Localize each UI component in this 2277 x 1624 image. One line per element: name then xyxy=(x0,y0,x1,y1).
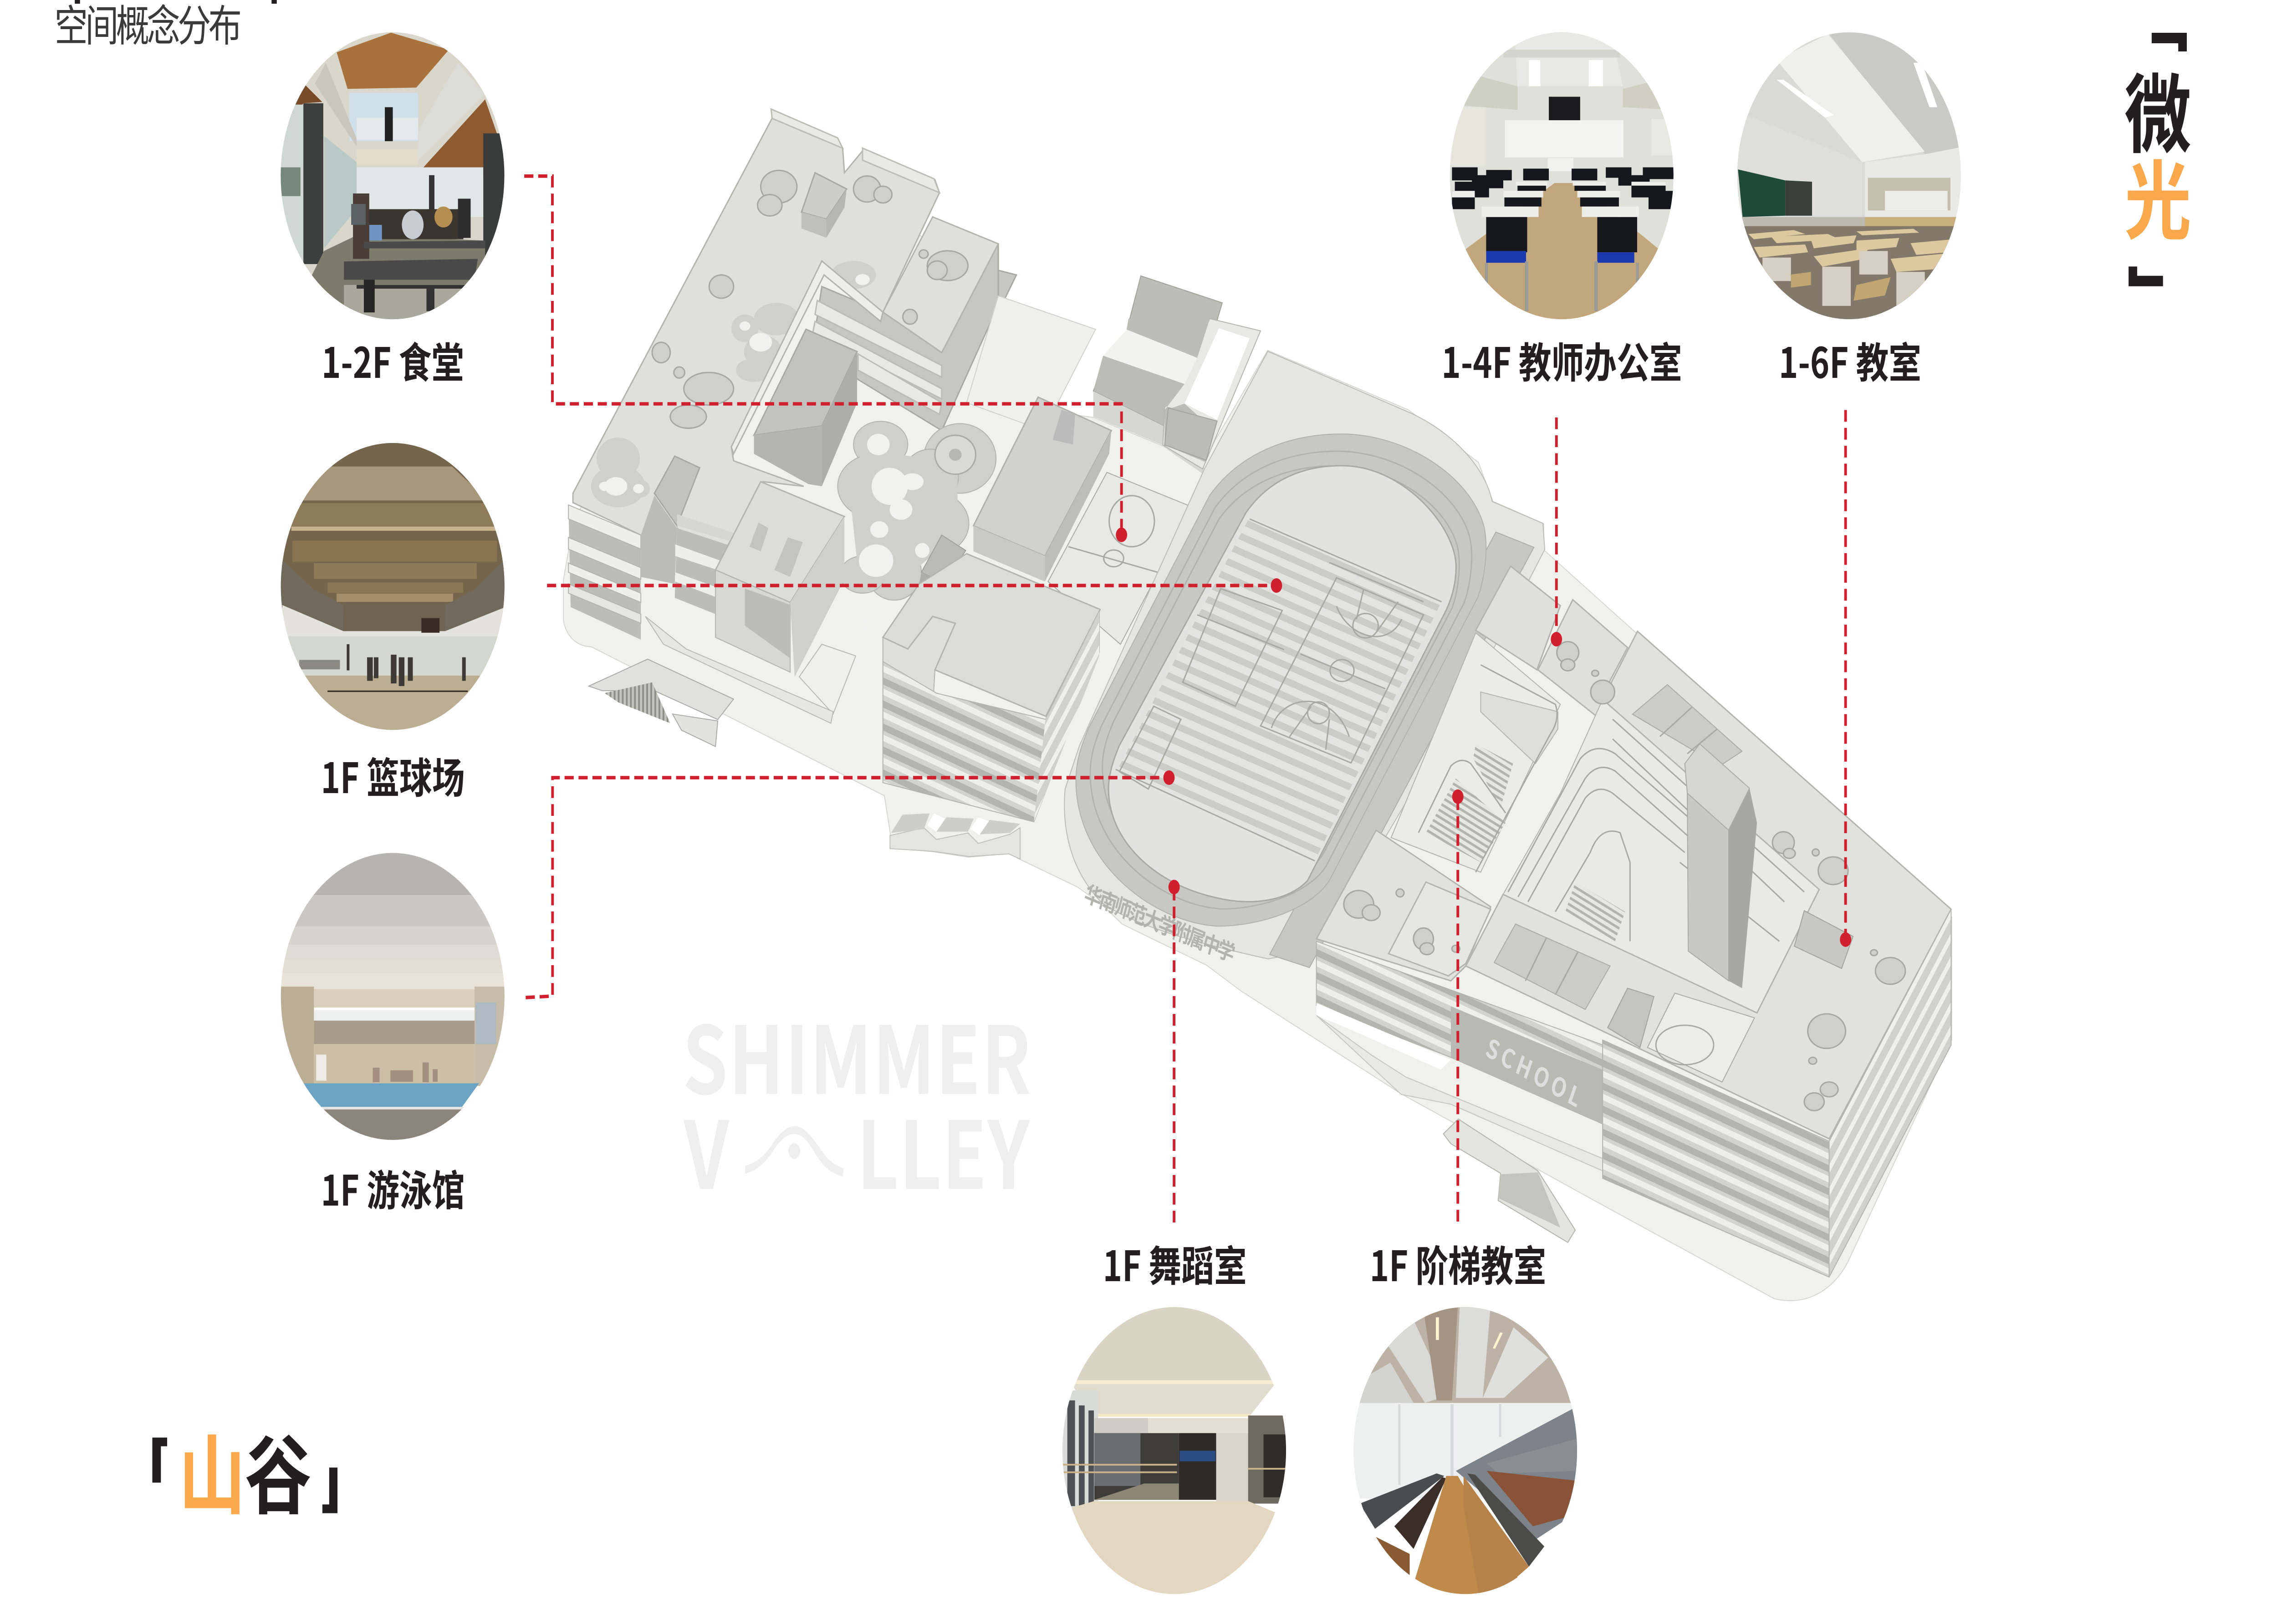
central garden xyxy=(837,421,996,671)
label: teacher office: 1-4F 教师办公室 xyxy=(1441,329,1682,390)
photo: classroom xyxy=(1734,31,1965,321)
photo: swimming hall xyxy=(280,851,506,1146)
right block side floors xyxy=(1829,909,1951,1277)
slogan: 山谷 xyxy=(153,1407,337,1532)
callout leader: canteen xyxy=(524,176,1127,542)
clock tower xyxy=(1685,744,1757,988)
stepped plinth xyxy=(890,814,1020,859)
left block floors xyxy=(568,505,641,640)
entrance shelter xyxy=(589,659,734,747)
low podium xyxy=(645,616,856,723)
right school block xyxy=(1317,566,1951,1139)
courtyard walled block beside court xyxy=(1094,319,1261,469)
callout leader: classroom xyxy=(1840,410,1851,947)
roof box xyxy=(802,173,847,238)
left courtyard xyxy=(1391,633,1560,872)
sports court lines xyxy=(1116,519,1442,861)
photo: canteen xyxy=(279,31,507,321)
right block west floors xyxy=(1317,941,1603,1124)
infield xyxy=(1108,466,1456,901)
front roof lower terrace xyxy=(883,616,955,709)
watermark logo: SHIMMER VALLEY: V xyxy=(684,1081,730,1216)
ramp and entrance gate xyxy=(1317,1003,1603,1242)
plaza paving xyxy=(967,296,1096,431)
rooftop boxes xyxy=(1608,911,1853,1048)
callout leader: swimming hall xyxy=(526,770,1174,998)
wing floors xyxy=(813,244,998,431)
photo: lecture hall xyxy=(1352,1305,1579,1597)
oval track xyxy=(1076,434,1486,926)
label: canteen: 1-2F 食堂 xyxy=(322,329,464,390)
top edge bracket marks xyxy=(75,0,277,4)
left school block and garden xyxy=(568,109,1222,747)
track surround xyxy=(1064,351,1545,959)
label: basketball hall: 1F 篮球场 xyxy=(321,744,465,805)
gymnasium box xyxy=(973,397,1112,581)
parapet top edges xyxy=(771,109,842,148)
label: lecture hall: 1F 阶梯教室 xyxy=(1370,1232,1546,1293)
photo: dance studio xyxy=(1060,1305,1291,1597)
main roof ring xyxy=(1466,631,1951,1139)
dark SCHOOL facade xyxy=(1451,1006,1603,1124)
pale cube xyxy=(715,482,844,677)
second front floors xyxy=(675,514,734,614)
photo: basketball hall xyxy=(280,443,506,730)
rooftop basketball court xyxy=(1648,993,1755,1082)
north roofs xyxy=(1475,566,1560,670)
axonometric campus model xyxy=(563,109,1952,1301)
slogan: 山谷: 山 xyxy=(179,1407,245,1532)
label: swimming hall: 1F 游泳馆 xyxy=(321,1157,465,1218)
rooftop planters xyxy=(1344,641,1905,1110)
slogan: 山谷: 谷 xyxy=(245,1407,311,1532)
running track and field xyxy=(1064,351,1545,967)
stepped terrace courtyard xyxy=(1503,699,1819,1013)
callout leader: basketball hall xyxy=(547,578,1282,593)
site ground xyxy=(563,131,1952,1301)
watermark logo: SHIMMER VALLEY: SHIMMER xyxy=(683,986,1031,1121)
label: classroom: 1-6F 教室 xyxy=(1779,329,1921,390)
watermark logo: SHIMMER VALLEY xyxy=(683,986,1031,1216)
dark tower volume xyxy=(754,329,857,486)
slogan: 微光: 微 xyxy=(2124,46,2191,170)
outdoor basketball court xyxy=(1048,473,1193,644)
front mid block floors xyxy=(883,611,1099,822)
field stripes xyxy=(1118,517,1441,861)
solar panels xyxy=(1494,685,1742,1009)
callout leader: teacher office xyxy=(1551,417,1562,647)
rooftop planters xyxy=(652,170,968,428)
dark-roof service buildings xyxy=(1093,276,1222,475)
slogan: 微光: 光 xyxy=(2124,132,2191,257)
main roof xyxy=(573,118,939,568)
straight lanes xyxy=(1270,532,1534,967)
callout leader: lecture hall xyxy=(1452,789,1464,1222)
right wing roof xyxy=(883,217,998,352)
label: dance studio: 1F 舞蹈室 xyxy=(1103,1232,1247,1293)
front mid block side xyxy=(1034,611,1099,822)
photo: teacher office xyxy=(1449,31,1677,321)
slogan: 微光 xyxy=(2124,33,2191,286)
courtyard wall xyxy=(731,261,883,454)
SCHOOL lettering: SCHOOL xyxy=(1482,1027,1587,1115)
stair core xyxy=(641,456,699,584)
callout leader: dance studio xyxy=(1169,880,1180,1222)
right block front floors xyxy=(1603,1040,1829,1277)
watermark logo: SHIMMER VALLEY: LLEY xyxy=(857,1081,1030,1216)
south-west roofs xyxy=(1317,830,1491,981)
small dark pavilion xyxy=(919,535,966,602)
front roof xyxy=(883,554,1100,716)
school name sign: 华南师范大学附属中学 xyxy=(1082,876,1239,968)
